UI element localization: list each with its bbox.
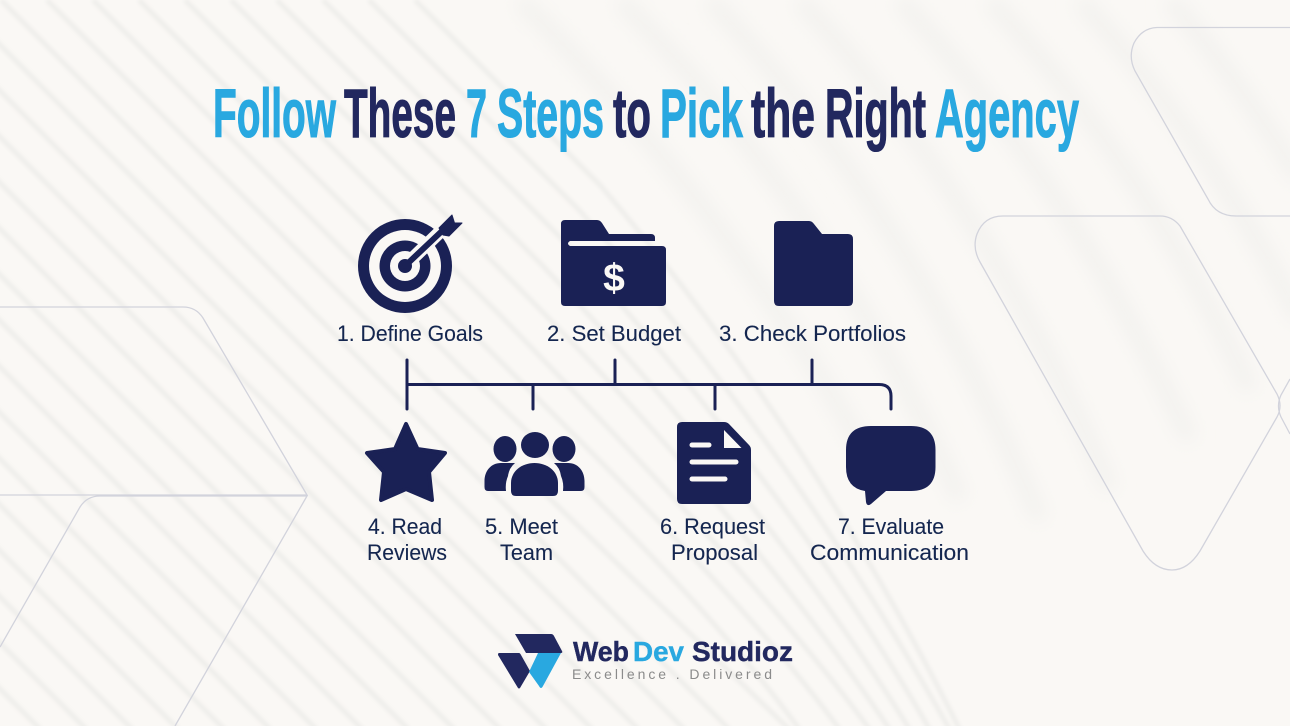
label: step 6: Proposal [671,540,758,565]
label: step 5: 5. Meet [485,514,558,539]
title: 7 [466,75,487,152]
title [213,75,1079,152]
title: to [613,75,651,152]
label: step 7 [810,514,969,565]
icon: budget folder with dollar sign: $ [603,257,625,300]
title: Agency [935,75,1079,152]
logo wordmark [573,636,793,667]
title: These [344,75,456,152]
logo wordmark: Studioz [692,636,793,667]
label: step 2: 2. Set Budget [547,321,681,346]
icon: budget folder with dollar sign [561,220,666,306]
label: step 3: 3. Check Portfolios [719,321,906,346]
title: Follow [213,75,336,152]
label: step 6 [660,514,765,565]
icon: speech bubble [846,426,936,505]
label: step 1: 1. Define Goals [337,321,483,346]
icon: portfolio folder [774,221,853,306]
logo wordmark: Dev [633,636,684,667]
label: step 7: Communication [810,540,969,565]
logo [498,634,793,688]
label: step 4: Reviews [367,540,447,565]
label: step 5: Team [500,540,553,565]
logo tagline: Excellence . Delivered [572,666,772,682]
title: Pick [660,75,743,152]
label: step 6: 6. Request [660,514,765,539]
icon: document [677,422,751,504]
icon: star [367,424,445,500]
label: step 4 [367,514,447,565]
label: step 7: 7. Evaluate [838,514,944,539]
title: the [751,75,815,152]
icon: team [484,432,584,496]
label: step 4: 4. Read [368,514,442,539]
logo mark [498,634,562,688]
icon: target with arrow [358,215,462,313]
label: step 5 [485,514,558,565]
title: Right [825,75,926,152]
logo wordmark: Web [573,636,629,667]
connector lines [407,360,891,409]
title: Steps [497,75,604,152]
